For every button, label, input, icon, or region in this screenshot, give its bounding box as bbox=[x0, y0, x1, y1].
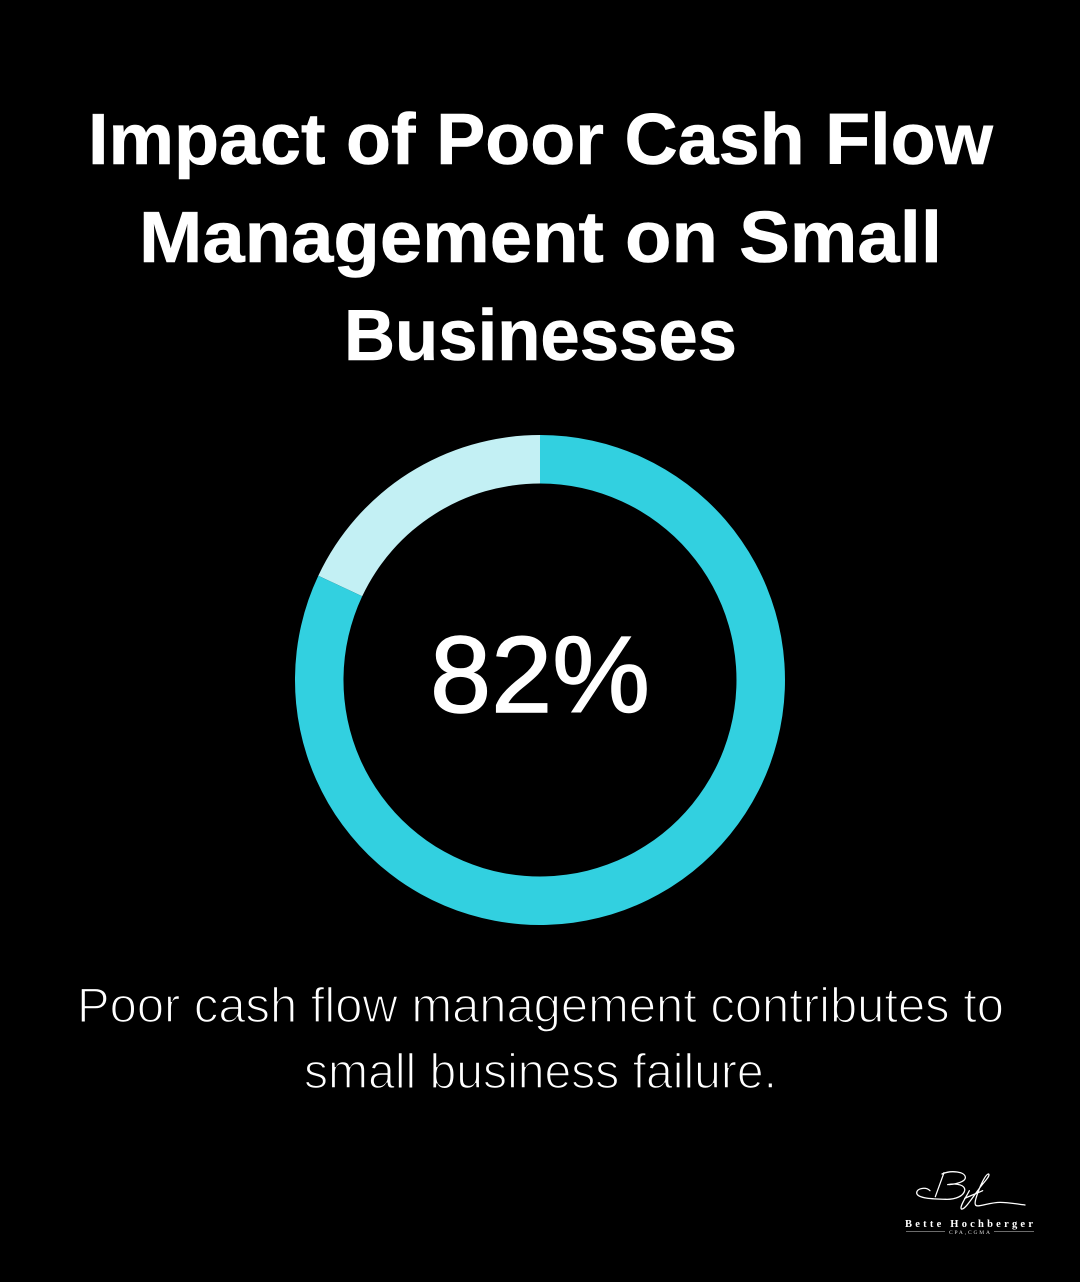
title: Management on Small bbox=[139, 198, 942, 278]
title: Businesses bbox=[344, 296, 737, 376]
title: Impact of Poor Cash Flow bbox=[88, 100, 994, 180]
donut chart: 82 percent bbox=[295, 435, 785, 925]
logo: Bette Hochberger bbox=[905, 1172, 1034, 1236]
ring segment: remaining 18 percent bbox=[318, 435, 540, 596]
logo credentials: CPA,CGMA bbox=[949, 1230, 990, 1236]
description text: Poor cash flow management contributes to bbox=[77, 979, 1004, 1033]
title bbox=[88, 100, 994, 376]
logo signature monogram bbox=[917, 1172, 1025, 1209]
ring segment: 82 percent bbox=[295, 435, 785, 925]
center value: 82% bbox=[430, 614, 650, 736]
logo name: Bette Hochberger bbox=[905, 1219, 1033, 1230]
description text bbox=[77, 979, 1004, 1099]
description text: small business failure. bbox=[304, 1045, 777, 1099]
